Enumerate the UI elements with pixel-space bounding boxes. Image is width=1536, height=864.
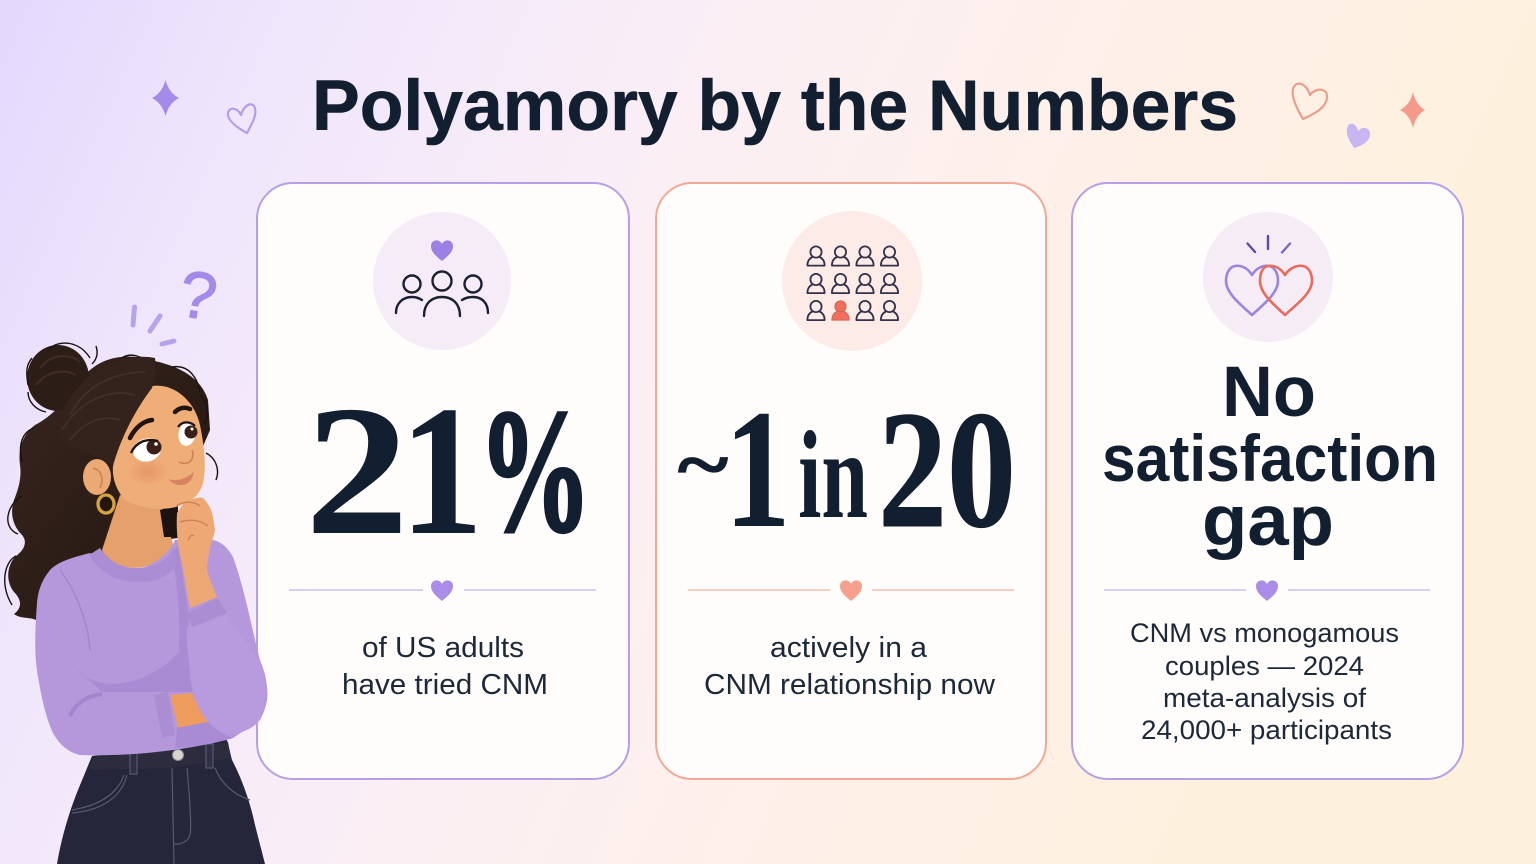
statistic: ~1 in 20: 1 (724, 374, 791, 563)
hair flyaways (5, 343, 218, 605)
caption (1130, 618, 1399, 745)
icon: overlapping hearts (1203, 212, 1333, 342)
headline: No (1222, 353, 1316, 432)
sweater (35, 540, 267, 755)
sweater hem (175, 722, 233, 748)
hair bun (27, 345, 89, 411)
caption: CNM relationship now (704, 669, 996, 701)
panel: 21 percent (257, 183, 629, 779)
sweater collar (89, 547, 177, 582)
caption: CNM vs monogamous (1130, 618, 1399, 648)
hand shadow hair block (160, 505, 178, 537)
headline: satisfaction (1102, 421, 1438, 495)
caption: have tried CNM (342, 669, 548, 701)
far forearm (187, 613, 265, 734)
caption (342, 632, 548, 701)
caption: of US adults (362, 632, 524, 664)
statistic: ~1 in 20 (678, 374, 1016, 563)
divider with heart (688, 580, 1014, 601)
icon: outline coral heart (1293, 84, 1327, 119)
headline: gap (1202, 482, 1334, 561)
caption: actively in a (770, 632, 928, 664)
icon: people grid (782, 211, 922, 351)
cuff near (154, 692, 175, 738)
ear (83, 459, 111, 495)
face (113, 386, 205, 509)
icon: purple sparkle (152, 80, 179, 116)
card outline (1072, 183, 1463, 779)
cuff far (187, 598, 227, 627)
statistic: ~1 in 20: 20 (878, 377, 1016, 563)
statistic: 21%: 2 (305, 367, 409, 574)
earring (98, 495, 114, 513)
icon: filled lilac heart (1347, 124, 1370, 148)
statistic: 21% (305, 367, 591, 574)
card outline (656, 183, 1046, 779)
near forearm (44, 640, 176, 755)
panel: 1 in 20 (656, 183, 1046, 779)
caption (704, 632, 996, 701)
hair front (58, 357, 156, 466)
caption: couples — 2024 (1165, 651, 1364, 681)
card outline (257, 183, 629, 779)
thought marks: ? (173, 255, 223, 335)
statistic: 21%: % (479, 373, 591, 568)
eyebrows (130, 408, 190, 438)
title: Polyamory by the Numbers (312, 67, 1238, 146)
icon: outline purple heart (228, 104, 255, 133)
eyes (131, 421, 198, 465)
caption: 24,000+ participants (1141, 715, 1392, 745)
thinking hand (176, 498, 227, 627)
neck (102, 495, 174, 568)
panel: no satisfaction gap (1072, 183, 1463, 779)
crossed hand (170, 693, 208, 728)
statistic: 21%: 1 (400, 368, 483, 574)
statistic: ~1 in 20: in (798, 407, 868, 545)
headline (1102, 353, 1438, 561)
icon: group with heart (373, 212, 511, 350)
thought marks (133, 255, 223, 344)
blush (126, 458, 170, 486)
nose and mouth (168, 450, 194, 485)
hair back (8, 356, 210, 640)
jeans (57, 740, 265, 864)
icon: coral sparkle (1400, 92, 1425, 128)
divider with heart (1104, 580, 1430, 601)
divider with heart (289, 580, 596, 601)
caption: meta-analysis of (1163, 683, 1367, 713)
character: thinking woman (5, 255, 267, 864)
statistic: ~1 in 20: ~ (678, 422, 728, 507)
